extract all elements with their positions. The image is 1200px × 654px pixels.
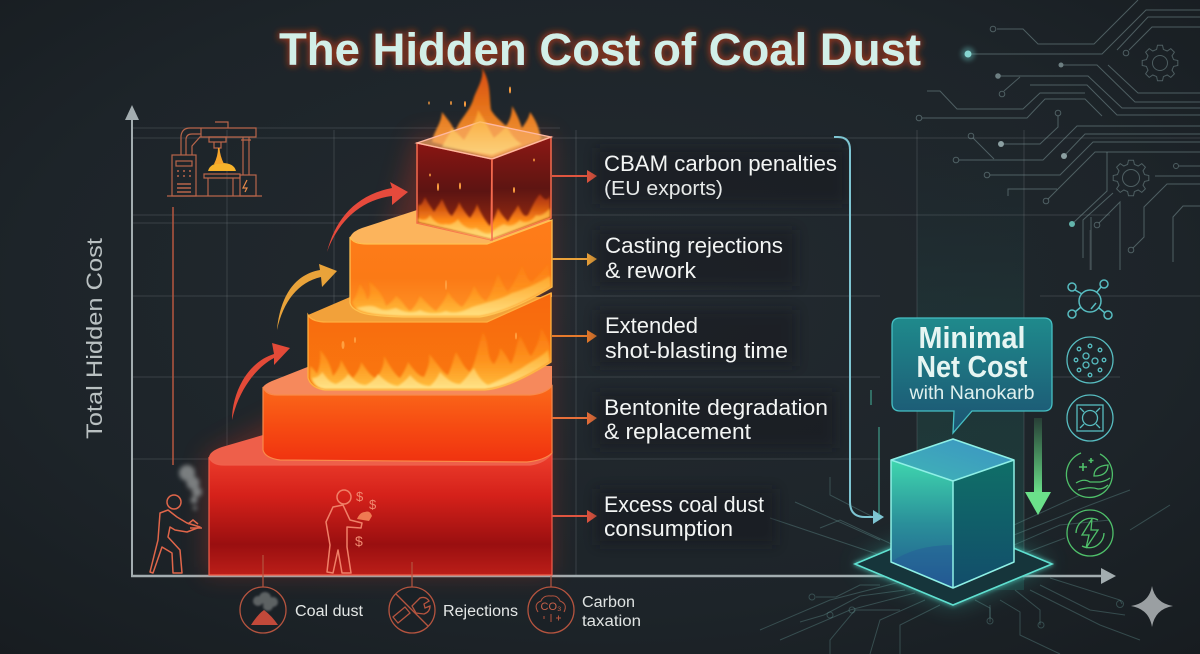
arrow: CBAM xyxy=(552,170,597,183)
icon: worker with money: $ xyxy=(355,533,363,549)
label: bentonite: Bentonite degradation xyxy=(604,395,828,420)
arrow: shot-blasting xyxy=(552,330,597,343)
legend: carbon taxation xyxy=(528,576,641,633)
title: The Hidden Cost of Coal Dust xyxy=(279,24,921,75)
label: CBAM: (EU exports) xyxy=(604,178,723,200)
red guide line xyxy=(172,207,174,465)
y axis label: Total Hidden Cost xyxy=(82,238,107,439)
circuit pattern top right xyxy=(916,0,1200,270)
legend: carbon taxation: CO₃ xyxy=(541,601,561,613)
callout: minimal net cost xyxy=(892,318,1052,433)
icon: foundry machine xyxy=(167,122,262,196)
legend: rejections xyxy=(389,562,518,633)
cube bottom flames xyxy=(418,194,550,239)
callout: minimal net cost: Minimal xyxy=(918,320,1026,355)
x axis xyxy=(131,568,1116,584)
label: shot blasting xyxy=(596,310,796,366)
legend: coal dust xyxy=(240,555,364,633)
teal light streaks xyxy=(871,390,879,515)
label: shot blasting: shot-blasting time xyxy=(605,338,788,363)
growth arrow 2 xyxy=(277,264,337,330)
net-cost platform xyxy=(855,522,1052,605)
arrow: casting xyxy=(552,253,597,266)
pyramid glow xyxy=(205,135,552,575)
label: bentonite: & replacement xyxy=(604,419,751,444)
tier 3: extended shot-blasting xyxy=(308,293,552,390)
growth arrow 3 xyxy=(232,343,290,420)
tier 4 highlight xyxy=(400,244,470,246)
icon: worker with money: $ xyxy=(369,497,377,512)
label: excess coal xyxy=(596,489,776,545)
icon: eco hand leaf xyxy=(1066,453,1112,497)
icon: filter square xyxy=(1067,395,1113,441)
green down arrow xyxy=(1025,418,1051,515)
legend: carbon taxation: Carbon xyxy=(582,594,635,611)
stepped cost pyramid xyxy=(205,68,552,575)
teal panel glow behind net cost xyxy=(917,130,1024,590)
icon: nanoparticles xyxy=(1067,337,1113,383)
callout: minimal net cost: Net Cost xyxy=(916,349,1028,384)
label: casting xyxy=(596,230,796,286)
label: CBAM: CBAM carbon penalties xyxy=(604,151,837,176)
growth arrow 1 xyxy=(327,182,408,252)
tier 2: bentonite degradation xyxy=(263,366,552,462)
y axis xyxy=(125,105,139,576)
sparks xyxy=(342,86,535,349)
label: CBAM xyxy=(596,148,846,204)
label: shot blasting: Extended xyxy=(605,313,698,338)
label: excess coal: Excess coal dust xyxy=(604,492,764,517)
tier 1: excess coal dust xyxy=(209,435,552,575)
tier 4: casting rejections xyxy=(350,210,552,317)
label: bentonite xyxy=(596,392,836,448)
icon: molecule xyxy=(1068,280,1112,319)
label: casting: & rework xyxy=(605,258,697,283)
circuit glowing nodes xyxy=(961,47,1075,227)
tier 3 flames xyxy=(310,328,550,389)
sparkle watermark xyxy=(1131,586,1173,627)
label: casting: Casting rejections xyxy=(605,233,783,258)
legend: coal dust: Coal dust xyxy=(295,603,364,620)
legend: rejections: Rejections xyxy=(443,603,518,620)
cube top face xyxy=(417,122,551,159)
arrow: bentonite xyxy=(552,412,597,425)
icon: energy bolt xyxy=(1067,510,1113,556)
flames above cube xyxy=(432,68,541,158)
icon: worker with money xyxy=(326,489,377,573)
icon: worker with money: $ xyxy=(356,489,364,504)
connector to Nanokarb cube xyxy=(834,137,884,524)
tier 4 flames xyxy=(352,264,551,316)
cube edge highlights xyxy=(491,159,493,240)
circuit pattern bottom right xyxy=(760,477,1170,654)
callout: minimal net cost: with Nanokarb xyxy=(908,383,1034,404)
legend: carbon taxation: taxation xyxy=(582,613,641,630)
chart grid xyxy=(132,128,1200,580)
icon: worker with shovel and smoke xyxy=(150,465,202,573)
arrow: excess coal xyxy=(552,510,597,523)
tier 5: cube CBAM xyxy=(417,68,551,240)
label: excess coal: consumption xyxy=(604,516,733,541)
Nanokarb cube xyxy=(891,439,1014,588)
